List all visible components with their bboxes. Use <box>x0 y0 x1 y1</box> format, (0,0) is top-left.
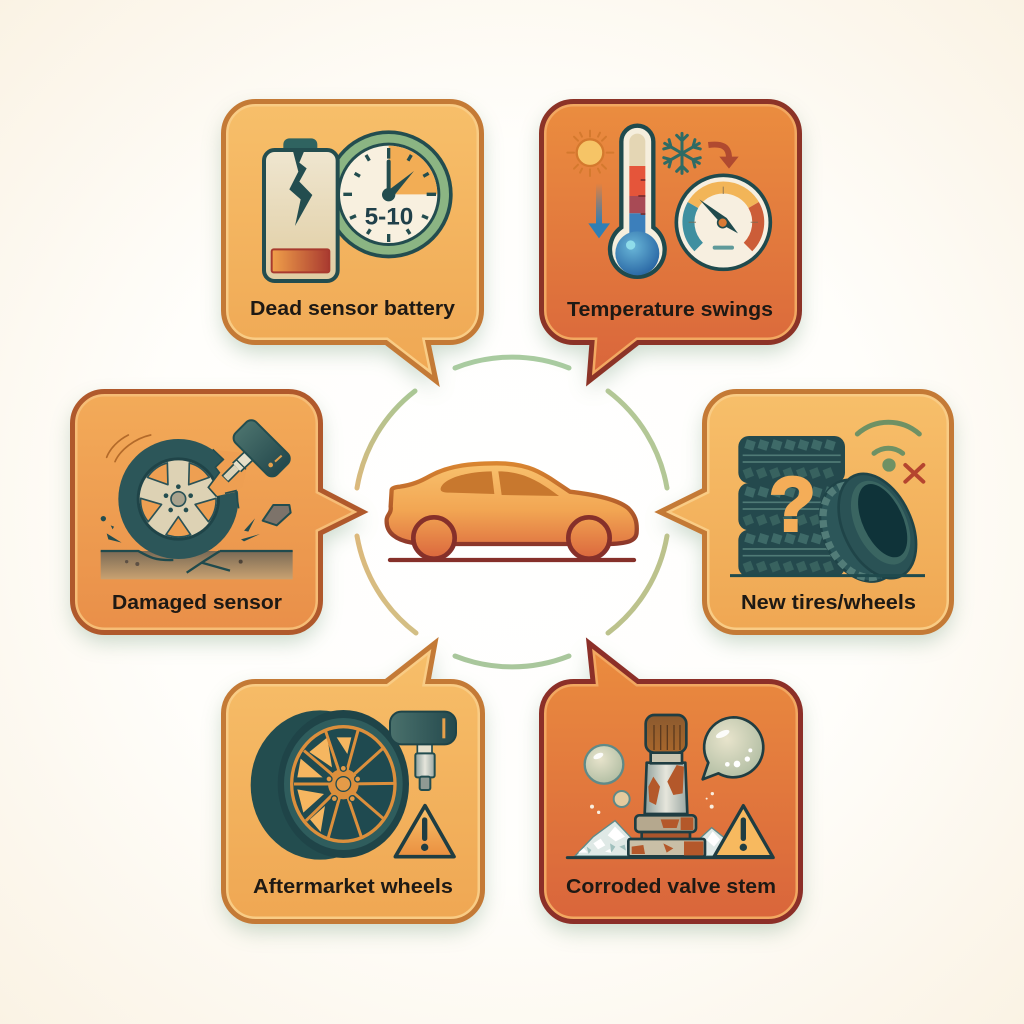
icon: tire stack <box>730 422 932 595</box>
thermometer <box>610 126 665 277</box>
center ring <box>357 357 667 667</box>
wheel <box>118 439 250 559</box>
warning triangle <box>395 806 454 857</box>
gauge <box>676 175 770 269</box>
snowflake <box>662 133 702 173</box>
warning triangle <box>714 806 773 857</box>
motion lines <box>107 435 151 462</box>
debris <box>101 516 260 543</box>
icon: temperature and gauge <box>567 126 770 277</box>
floor line <box>730 571 925 580</box>
icon: corroded valve <box>567 715 773 858</box>
label: damaged sensor: Damaged sensor <box>112 592 282 614</box>
icon: no wifi signal <box>857 422 923 482</box>
valve stem <box>628 715 705 856</box>
car body <box>387 463 637 544</box>
label: aftermarket wheels: Aftermarket wheels <box>253 876 453 898</box>
road <box>101 551 293 579</box>
ground line <box>567 853 773 862</box>
panel: temperature swings <box>542 102 800 381</box>
car ground line <box>390 553 634 566</box>
speech bubble <box>703 717 763 779</box>
icon: wheel hitting pothole <box>101 417 293 579</box>
question mark: ? <box>769 463 816 548</box>
front and rear wheels <box>413 517 610 559</box>
down arrow <box>588 183 610 238</box>
salt piles <box>575 821 725 856</box>
tire pressure sensor <box>390 712 456 790</box>
battery <box>264 138 338 281</box>
label: corroded valve stem: Corroded valve stem <box>566 876 776 898</box>
sun <box>567 131 613 176</box>
curved arrow <box>708 145 729 158</box>
wheel <box>251 710 409 860</box>
tire pressure sensor <box>225 417 293 479</box>
bubbles <box>585 745 714 814</box>
rock <box>263 505 291 525</box>
leaning tire <box>804 461 932 595</box>
car windows <box>441 471 559 496</box>
clock label: 5-10 <box>365 204 413 231</box>
label: dead sensor battery: Dead sensor battery <box>250 298 456 320</box>
icon: clock and battery <box>264 130 453 281</box>
panel: new tires/wheels <box>660 392 952 632</box>
panel: dead sensor battery <box>224 102 482 381</box>
panel: damaged sensor <box>72 392 363 632</box>
label: temperature swings: Temperature swings <box>567 299 773 321</box>
icon: wheel with sensor <box>251 710 456 860</box>
shadows beneath the bubbles <box>72 110 952 930</box>
panel: corroded valve stem <box>542 643 800 922</box>
label: new tires/wheels: New tires/wheels <box>741 592 916 614</box>
stacked tires <box>738 436 845 577</box>
clock <box>325 130 453 258</box>
panel: aftermarket wheels <box>224 643 482 922</box>
central car <box>387 463 637 560</box>
